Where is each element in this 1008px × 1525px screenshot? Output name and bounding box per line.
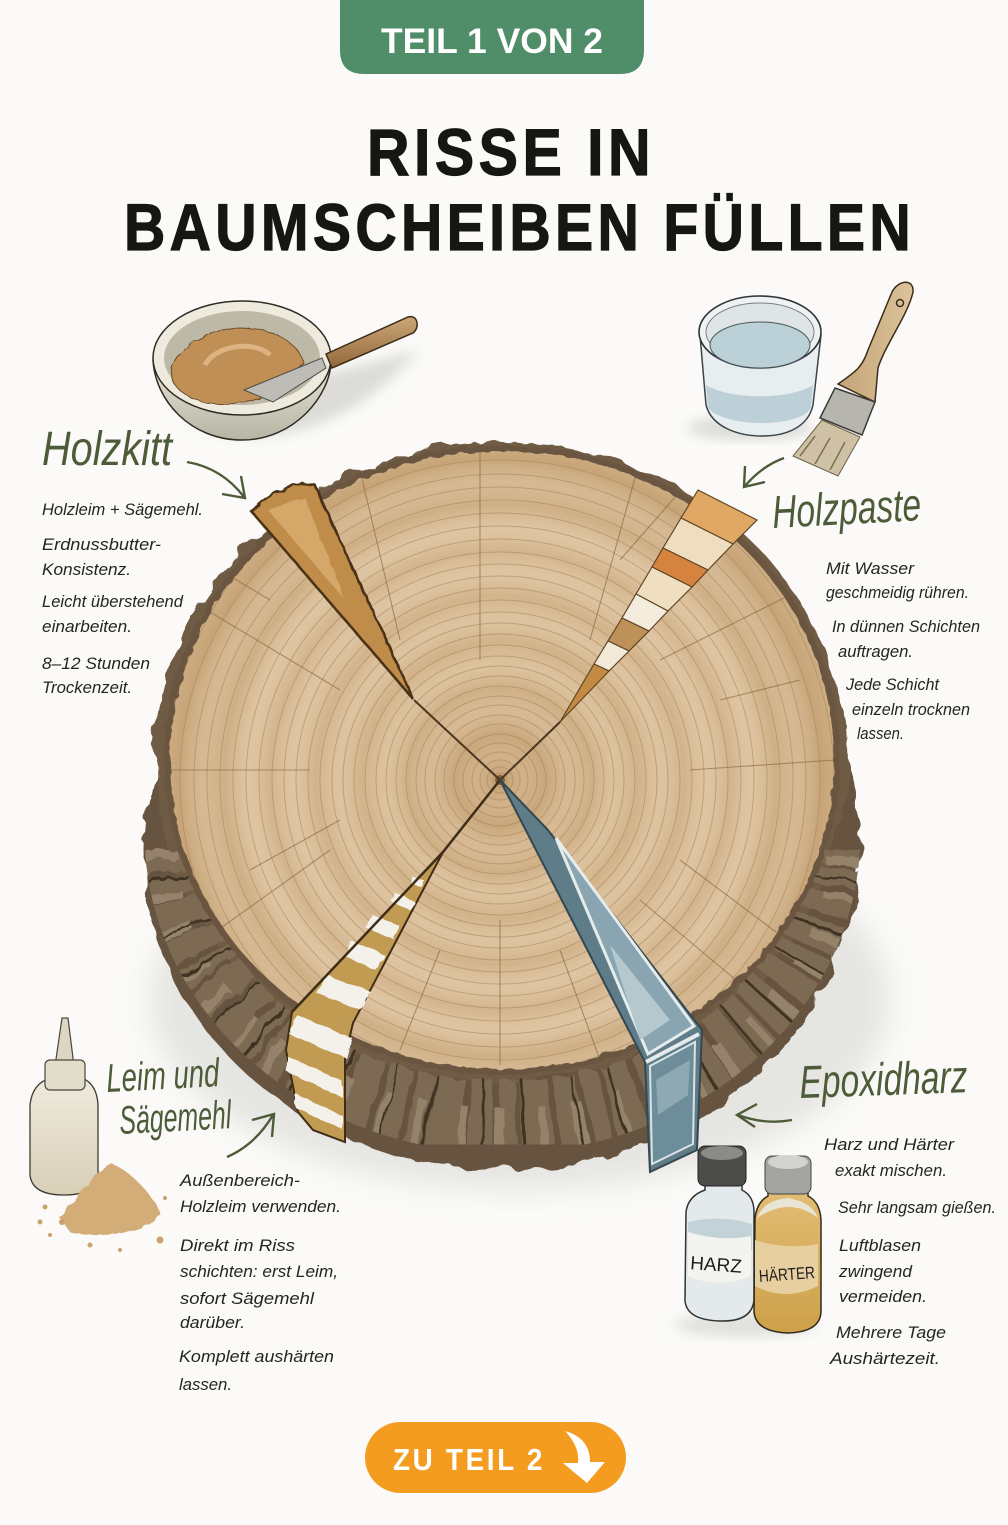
text: Holzpaste instructions: Jede Schicht (845, 675, 940, 694)
crack: Leim und Sägemehl layers (286, 780, 500, 1142)
button: zu Teil 2: ZU TEIL 2 (393, 1442, 545, 1477)
panel: Holzpaste (744, 458, 980, 743)
arrow: Holzpaste (744, 458, 784, 487)
icon: glass of water and brush (688, 282, 913, 476)
text: Holzkitt instructions (42, 500, 203, 697)
crack: Epoxidharz fill (500, 780, 702, 1172)
crack: Holzkitt fill (252, 483, 500, 780)
text: Leim und Sägemehl instructions: schichten: erst Leim, (180, 1262, 338, 1281)
text: Holzpaste instructions: auftragen. (838, 642, 913, 661)
text: Holzkitt instructions: Trockenzeit. (42, 678, 132, 697)
top tab: part label (340, 0, 644, 74)
text: Epoxidharz instructions: Mehrere Tage (836, 1323, 946, 1342)
text: Holzkitt instructions: einarbeiten. (42, 617, 132, 636)
text: Epoxidharz instructions: Sehr langsam gießen. (838, 1198, 996, 1217)
heading: Holzpaste: Holzpaste (771, 478, 922, 538)
cut face (166, 446, 837, 1114)
button: zu Teil 2 (365, 1422, 626, 1493)
arrow: Holzkitt (187, 462, 245, 498)
title: RISSE IN (367, 115, 655, 189)
bottle: HÄRTER (754, 1155, 821, 1333)
text: Epoxidharz instructions: vermeiden. (839, 1287, 927, 1306)
top tab: part label: TEIL 1 VON 2 (381, 22, 603, 61)
panel: Leim und Sägemehl (105, 1051, 341, 1394)
text: Epoxidharz instructions (824, 1135, 996, 1368)
bottle: HARZ: HARZ (689, 1253, 743, 1278)
text: Holzpaste instructions (826, 559, 980, 743)
text: Epoxidharz instructions: Harz und Härter (824, 1135, 955, 1154)
panel: Holzkitt (42, 423, 245, 697)
text: Epoxidharz instructions: zwingend (838, 1262, 913, 1281)
text: Leim und Sägemehl instructions: Direkt im Riss (180, 1236, 296, 1255)
heading: Leim und Sägemehl: Leim und (105, 1051, 222, 1101)
text: Epoxidharz instructions: Luftblasen (839, 1236, 921, 1255)
heading: Leim und Sägemehl (105, 1051, 233, 1143)
panel: Epoxidharz (737, 1050, 996, 1368)
heading: Leim und Sägemehl: Sägemehl (118, 1093, 233, 1143)
arrow: Leim und Sägemehl (227, 1114, 274, 1157)
ground shadow (150, 810, 890, 1190)
crack: Holzpaste layers (500, 490, 757, 780)
pith (495, 775, 505, 785)
text: Holzkitt instructions: Leicht überstehend (42, 592, 184, 611)
icon: bowl with wood filler and spatula (153, 301, 420, 440)
text: Leim und Sägemehl instructions: lassen. (179, 1375, 232, 1394)
radial checks (170, 450, 835, 1065)
text: Holzpaste instructions: geschmeidig rühren. (826, 583, 969, 602)
text: Leim und Sägemehl instructions: darüber. (180, 1313, 245, 1332)
brush (838, 282, 913, 402)
text: Holzkitt instructions: Konsistenz. (42, 560, 131, 579)
text: Epoxidharz instructions: Aushärtezeit. (829, 1349, 940, 1368)
growth rings (174, 460, 834, 1064)
tree slice illustration (144, 442, 890, 1190)
title (124, 115, 915, 264)
text: Leim und Sägemehl instructions (179, 1171, 341, 1394)
text: Holzpaste instructions: lassen. (857, 724, 904, 743)
text: Holzpaste instructions: Mit Wasser (826, 559, 915, 578)
text: Leim und Sägemehl instructions: Komplett aushärten (179, 1347, 334, 1366)
text: Leim und Sägemehl instructions: sofort Sägemehl (180, 1289, 315, 1308)
icon: curved arrow (563, 1431, 605, 1483)
icon: resin and hardener bottles (675, 1146, 821, 1337)
text: Holzkitt instructions: Holzleim + Sägemehl. (42, 500, 203, 519)
text: Epoxidharz instructions: exakt mischen. (835, 1161, 947, 1180)
heading: Holzkitt: Holzkitt (42, 423, 173, 476)
text: Leim und Sägemehl instructions: Holzleim verwenden. (180, 1197, 341, 1216)
arrow: Epoxidharz (737, 1104, 792, 1127)
bark side (144, 442, 860, 1170)
text: Holzkitt instructions: 8–12 Stunden (42, 654, 150, 673)
bottle: HÄRTER: HÄRTER (758, 1263, 816, 1286)
rim of bark inside face (167, 448, 837, 1072)
icon: glue bottle and sawdust (30, 1018, 167, 1252)
text: Holzpaste instructions: einzeln trocknen (852, 700, 970, 719)
text: Leim und Sägemehl instructions: Außenbereich- (179, 1171, 300, 1190)
bottle: HARZ (685, 1146, 754, 1321)
text: Holzpaste instructions: In dünnen Schichten (832, 617, 980, 636)
text: Holzkitt instructions: Erdnussbutter- (42, 535, 161, 554)
